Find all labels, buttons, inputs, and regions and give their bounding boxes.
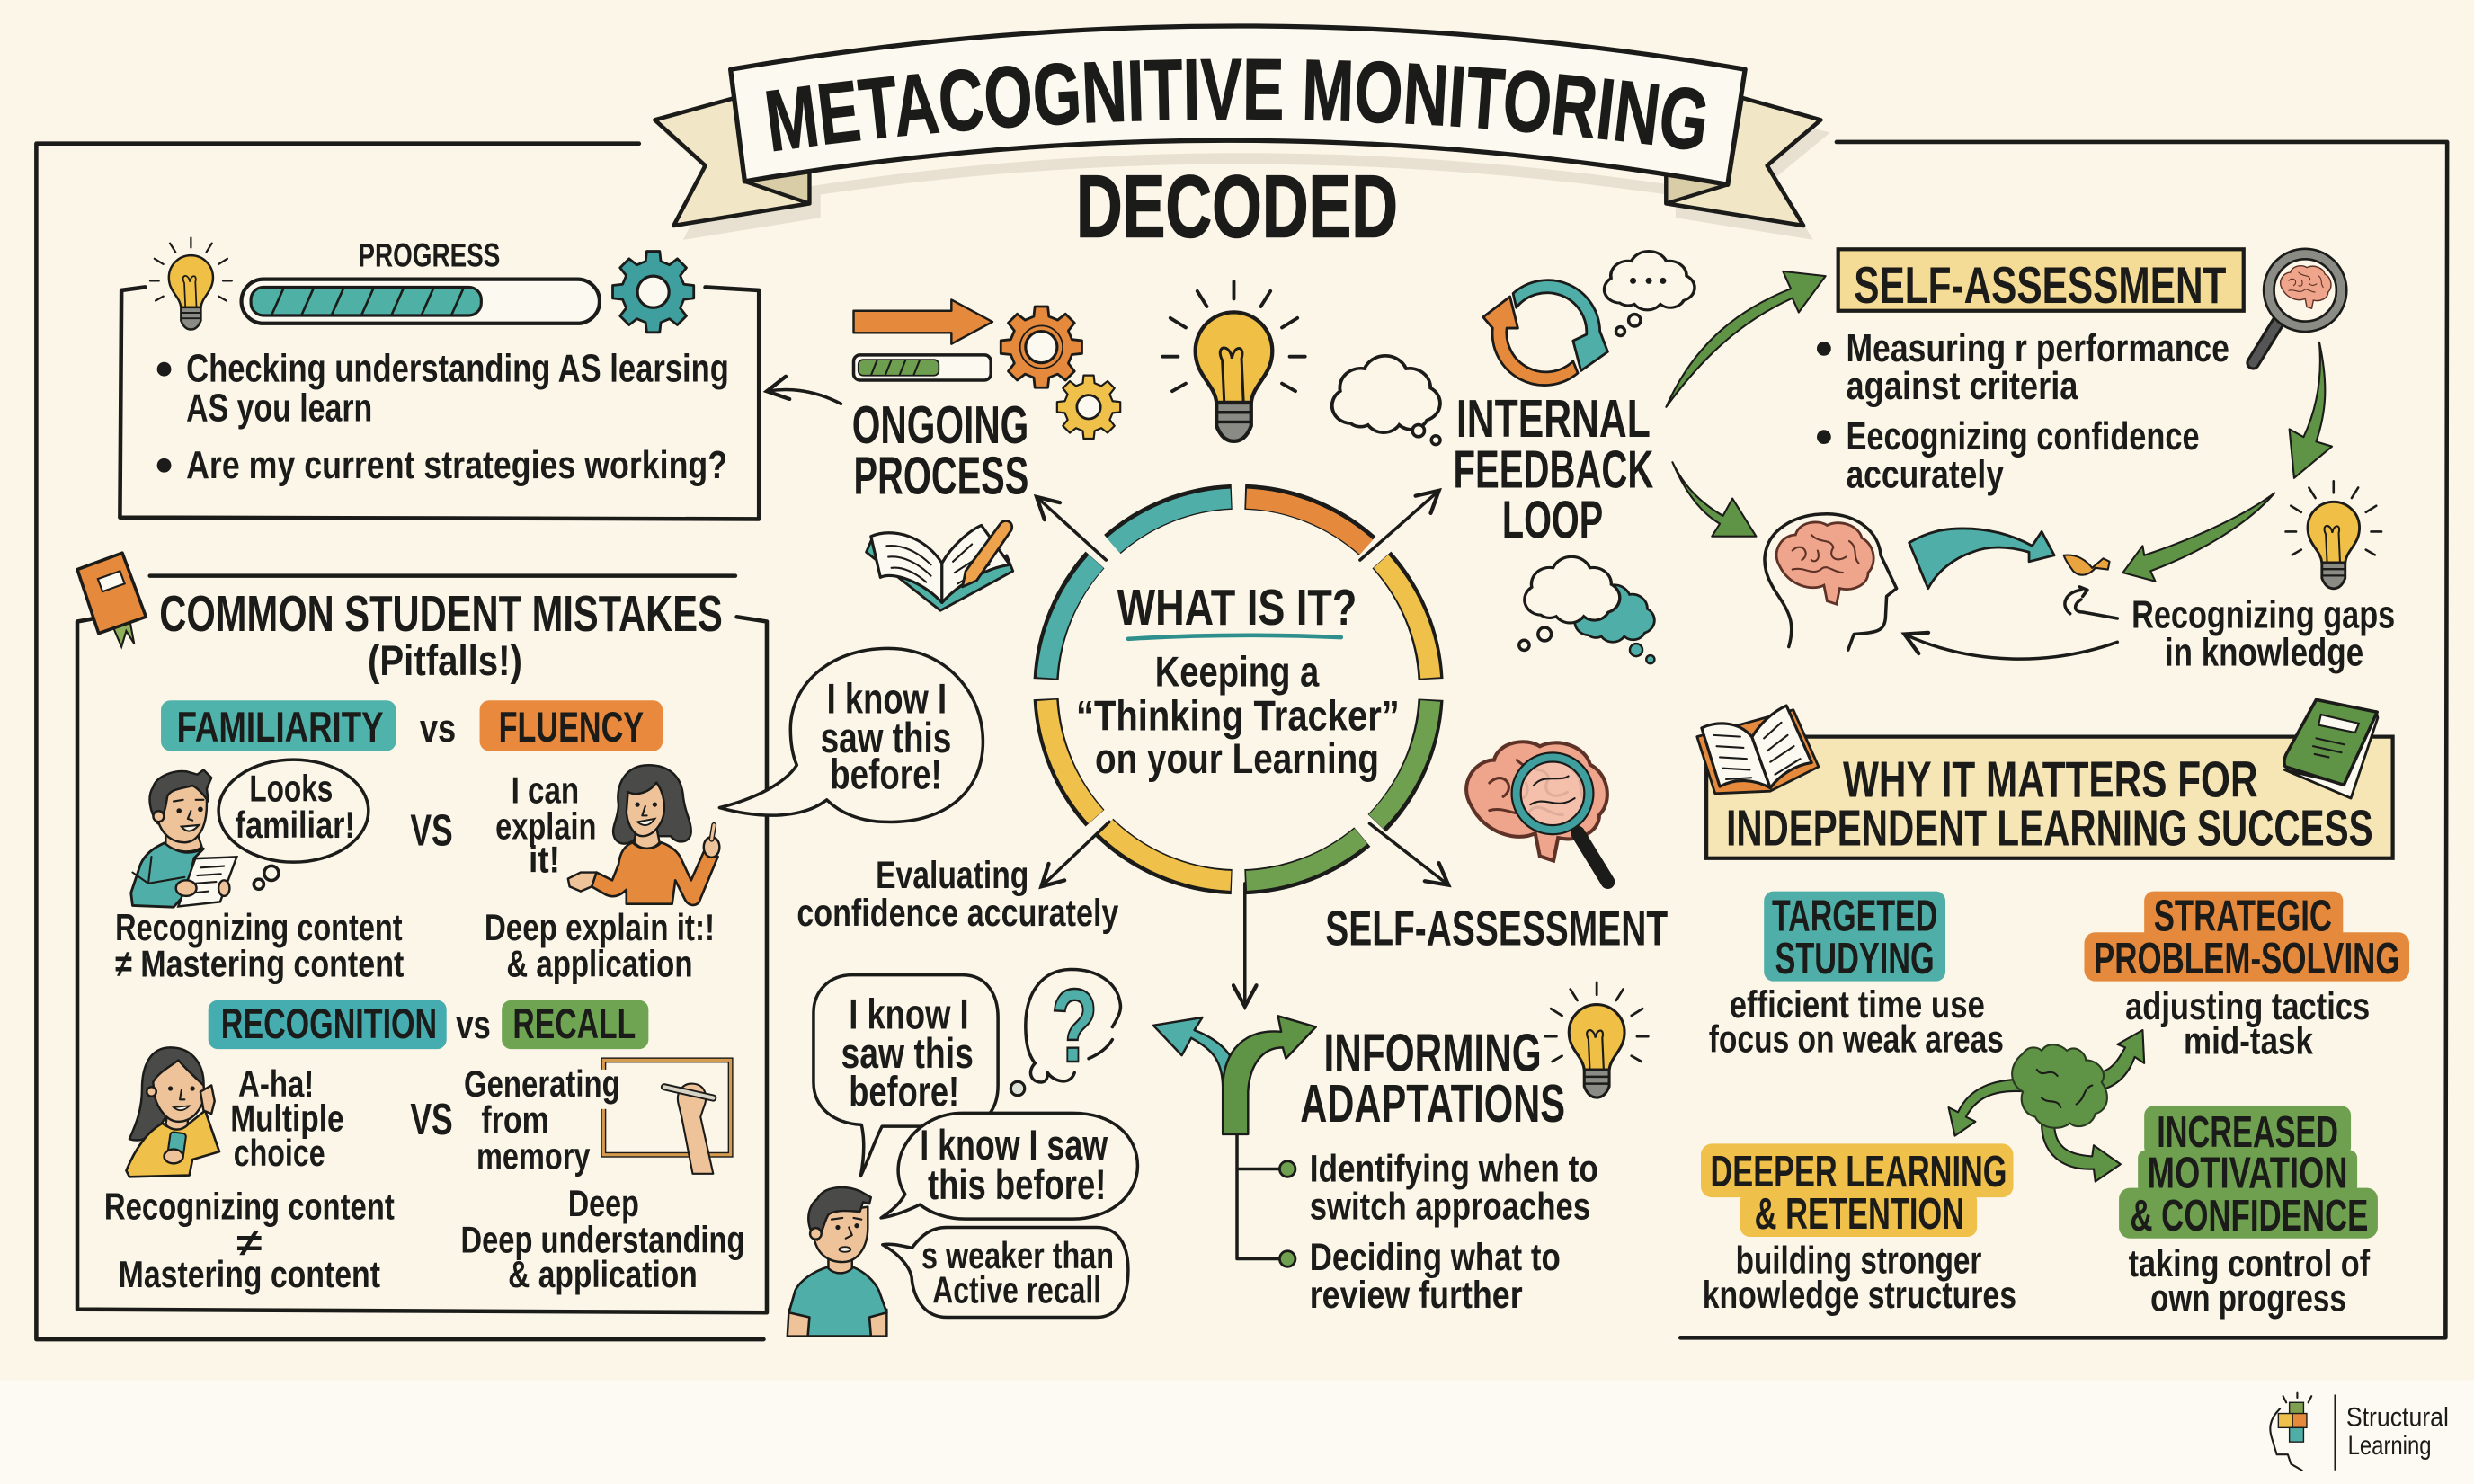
logo text: Structural <box>2346 1403 2449 1433</box>
speech bubble: i know i saw: I know I saw <box>920 1122 1108 1169</box>
speech bubble: i know i saw this before: before! <box>830 751 942 799</box>
speech bubble: i know i saw this before: saw this <box>821 715 951 762</box>
speech bubble: i know i saw this before bottom: I know I <box>849 991 969 1038</box>
icon: orange arrow <box>854 299 992 344</box>
logo: structural learning <box>2270 1393 2449 1471</box>
block: increased motivation: & CONFIDENCE <box>2130 1192 2368 1240</box>
vs label: VS <box>410 807 453 856</box>
text: a-ha multiple choice <box>230 1062 344 1174</box>
arrow: circle to informing adaptations <box>1244 884 1246 1007</box>
speech bubble: i know i saw: this before! <box>928 1161 1106 1209</box>
icon: teal and white clouds <box>1519 556 1654 663</box>
ribbon left tail <box>654 98 809 226</box>
block: strategic problem-solving: mid-task <box>2184 1019 2313 1062</box>
text: generating from memory: memory <box>476 1135 591 1177</box>
block: targeted studying: efficient time use <box>1730 983 1985 1026</box>
vs label: VS <box>410 1096 453 1144</box>
speech bubble: i know i saw this before: I know I <box>827 675 947 723</box>
caption: recognizing not mastering: ≠ <box>236 1222 262 1264</box>
icon: brain with magnifier <box>1466 742 1607 882</box>
underline <box>1128 635 1341 639</box>
icon: big lightbulb <box>1162 281 1305 441</box>
logo divider <box>2335 1394 2336 1471</box>
icon: cycle arrows <box>1483 280 1607 386</box>
bullet 1: AS you learn <box>186 387 372 431</box>
heading: self-assessment middle: SELF-ASSESSMENT <box>1325 901 1668 955</box>
heading: internal feedback loop <box>1453 388 1653 549</box>
text: generating from memory: Generating <box>464 1062 620 1105</box>
bubble: looks familiar: familiar! <box>236 804 355 846</box>
heading: informing adaptations <box>1300 1023 1565 1133</box>
bullet list: Measuring r performance <box>1846 326 2229 370</box>
label: evaluating confidence: confidence accurately <box>796 892 1118 935</box>
item: identifying: switch approaches <box>1310 1186 1590 1229</box>
block: increased motivation: taking control of <box>2129 1242 2371 1285</box>
icon: thought cloud left <box>1332 356 1440 445</box>
arrow: circle to evaluating <box>1041 822 1109 886</box>
logo text <box>2346 1403 2449 1461</box>
item: deciding: review further <box>1310 1274 1523 1317</box>
block: deeper learning: building stronger <box>1736 1239 1982 1282</box>
bullet 2: Are my current strategies working? <box>186 443 727 487</box>
bullet list <box>1817 326 2229 496</box>
vs label: vs <box>420 706 456 751</box>
heading box <box>1706 737 2393 858</box>
bullet list: accurately <box>1846 452 2004 496</box>
definition text <box>1076 648 1400 783</box>
title banner <box>653 23 1830 240</box>
logo text: Learning <box>2348 1431 2432 1461</box>
block: targeted studying: STUDYING <box>1775 935 1935 983</box>
caption: recognizing vs mastering <box>115 906 404 984</box>
ribbon main band <box>731 26 1745 184</box>
pill: familiarity: FAMILIARITY <box>177 704 384 751</box>
heading: internal feedback loop: INTERNAL <box>1456 388 1651 449</box>
icon: small lightbulb <box>2286 481 2381 589</box>
caption: deep explain <box>485 906 715 984</box>
icon: teal gear <box>613 252 694 333</box>
title line 2: DECODED <box>1076 156 1398 255</box>
icon: orange gear <box>1001 307 1081 387</box>
heading: internal feedback loop: FEEDBACK <box>1453 439 1653 499</box>
pill: recall: RECALL <box>512 1000 636 1048</box>
arrow: return to head <box>1904 635 2117 659</box>
arrow: magnifier to bulb <box>2290 342 2332 478</box>
heading: ongoing process: PROCESS <box>854 445 1028 505</box>
icon: orange book <box>77 553 146 647</box>
text: i can explain it: I can <box>512 769 579 811</box>
bullet 1 <box>157 347 729 431</box>
caption: deep explain: & application <box>506 942 692 984</box>
caption: recognizing not mastering: Mastering content <box>119 1253 380 1295</box>
icon: lightbulb <box>1545 982 1648 1097</box>
footer strip <box>0 1381 2474 1484</box>
bullet list: against criteria <box>1846 364 2078 408</box>
icon: forked arrow <box>1153 1016 1316 1134</box>
branch lines <box>1237 1134 1281 1259</box>
caption: recognizing vs mastering: ≠ Mastering content <box>115 942 404 984</box>
arrow: circle to ongoing process <box>1037 497 1106 560</box>
caption: recognizing vs mastering: Recognizing content <box>115 906 403 948</box>
arrow: feedback to head <box>1672 462 1756 537</box>
block: deeper learning: DEEPER LEARNING <box>1711 1148 2007 1196</box>
arrow: ongoing process to progress panel <box>767 390 841 404</box>
panel: why it matters <box>1697 699 2409 1320</box>
icon: open book <box>1697 706 1819 794</box>
ongoing process group <box>852 299 1120 505</box>
icon: green brain with arrows <box>1949 1030 2144 1182</box>
label: evaluating confidence: Evaluating <box>876 854 1028 897</box>
heading: COMMON STUDENT MISTAKES <box>159 585 723 642</box>
block: targeted studying: TARGETED <box>1772 892 1937 940</box>
title line 1: METACOGNITIVE MONITORING <box>766 59 1706 151</box>
bubble: looks familiar: Looks <box>249 768 333 810</box>
outer frame: right <box>1680 142 2447 1337</box>
block: increased motivation: INCREASED <box>2157 1108 2338 1157</box>
arrow: bulb to brain <box>2122 493 2274 582</box>
arrow: circle to self-assessment <box>1369 823 1448 885</box>
block: deeper learning: knowledge structures <box>1703 1274 2016 1317</box>
text: i can explain it: explain <box>495 805 596 848</box>
caption: deep understanding: Deep <box>568 1182 639 1224</box>
speech bubble: i know i saw this before <box>719 648 983 822</box>
definition text: “Thinking Tracker” <box>1076 693 1400 741</box>
ribbon right fold <box>1666 172 1728 203</box>
label box <box>1838 249 2244 311</box>
panel: self-assessment <box>1817 249 2342 496</box>
heading: informing adaptations: INFORMING <box>1324 1023 1542 1083</box>
label: evaluating confidence <box>796 854 1118 935</box>
bullet 1: Checking understanding AS learsing <box>186 347 729 391</box>
caption: recognizing not mastering <box>104 1186 395 1295</box>
outer frame: left <box>36 144 763 1339</box>
heading: ongoing process <box>852 395 1028 505</box>
block: deeper learning <box>1701 1143 2016 1317</box>
speech bubble: i know i saw <box>881 1113 1137 1219</box>
pill: recognition: RECOGNITION <box>221 1000 437 1048</box>
speech bubble: i know i saw this before bottom: saw this <box>841 1030 974 1078</box>
progress bar <box>242 280 600 324</box>
item: identifying: Identifying when to <box>1310 1148 1598 1191</box>
label: recognizing gaps: in knowledge <box>2165 631 2363 675</box>
text: generating from memory <box>464 1062 623 1177</box>
speech bubble: weaker than active recall: Active recall <box>932 1270 1101 1311</box>
progress label: PROGRESS <box>358 237 500 274</box>
diagram: what is it circle <box>1046 497 1431 882</box>
icon: magnifier with brain <box>2253 254 2342 363</box>
label: recognizing gaps <box>2131 593 2395 675</box>
internal feedback group <box>1332 252 1695 663</box>
icon: whiteboard with hand <box>603 1060 731 1174</box>
caption: deep understanding: Deep understanding <box>461 1219 744 1261</box>
block: increased motivation: own progress <box>2150 1276 2346 1320</box>
text: i can explain it: it! <box>529 839 560 881</box>
text: a-ha multiple choice: choice <box>234 1132 325 1174</box>
speech bubble: weaker than active recall: s weaker than <box>921 1235 1114 1276</box>
speech bubble: i know i saw this before bottom <box>814 975 998 1176</box>
block: targeted studying <box>1709 892 2004 1062</box>
icon: lightbulb <box>150 237 232 329</box>
block: deeper learning: & RETENTION <box>1755 1190 1964 1239</box>
block: increased motivation <box>2119 1106 2378 1320</box>
heading: informing adaptations: ADAPTATIONS <box>1300 1073 1565 1133</box>
thought bubble: question mark: ? <box>1051 967 1099 1084</box>
icon: yellow gear <box>1057 376 1120 439</box>
figure: woman with phone <box>126 1047 219 1177</box>
heading: SELF-ASSESSMENT <box>1854 257 2226 315</box>
heading: internal feedback loop: LOOP <box>1502 489 1603 549</box>
heading text <box>1726 751 2373 857</box>
caption: deep explain: Deep explain it:! <box>485 906 715 948</box>
label: recognizing gaps: Recognizing gaps <box>2131 593 2395 637</box>
icon: head with brain <box>1765 514 1897 650</box>
figure: boy reading <box>131 769 236 907</box>
definition text: on your Learning <box>1095 735 1379 783</box>
arrow: circle to internal feedback <box>1360 491 1439 560</box>
informing adaptations group <box>1153 982 1648 1317</box>
item: identifying <box>1279 1148 1598 1229</box>
block: strategic problem-solving: adjusting tactics <box>2125 985 2370 1028</box>
figure: boy thinking <box>788 1187 886 1337</box>
arrow: feedback to self-assessment <box>1666 271 1826 407</box>
ribbon left fold <box>744 172 809 203</box>
ribbon right tail <box>1666 98 1820 226</box>
block: strategic problem-solving: STRATEGIC <box>2154 892 2332 940</box>
text: a-ha multiple choice: A-ha! <box>238 1062 314 1105</box>
icon: thought cloud with dots <box>1605 252 1695 335</box>
caption: deep understanding: & application <box>508 1253 698 1295</box>
block: strategic problem-solving <box>2084 892 2409 1062</box>
text: generating from memory: from <box>481 1098 549 1141</box>
panel: progress <box>120 237 759 519</box>
speech bubble: i know i saw this before bottom: before! <box>849 1068 959 1115</box>
vs label: vs <box>456 1003 491 1047</box>
text: a-ha multiple choice: Multiple <box>230 1097 344 1139</box>
arrow: teal curved <box>1909 529 2054 589</box>
icon: small swirl <box>2065 587 2117 618</box>
definition text: Keeping a <box>1155 648 1320 696</box>
speech bubble: weaker than active recall <box>883 1227 1128 1317</box>
heading: ongoing process: ONGOING <box>852 395 1028 455</box>
ring segments <box>1046 497 1431 882</box>
text: i can explain it <box>495 769 596 881</box>
caption: recognizing not mastering: Recognizing content <box>104 1186 395 1228</box>
icon: open book with pencil <box>867 520 1013 610</box>
panel: common student mistakes <box>77 553 767 1312</box>
thought bubble: question mark <box>1010 967 1120 1096</box>
heading text: WHY IT MATTERS FOR <box>1843 751 2258 807</box>
item: deciding <box>1279 1236 1561 1317</box>
block: targeted studying: focus on weak areas <box>1709 1018 2004 1062</box>
heading: what is it: WHAT IS IT? <box>1117 579 1357 635</box>
bubble: looks familiar <box>218 760 369 889</box>
icon: small orange leaf <box>2064 555 2110 575</box>
subheading: (Pitfalls!) <box>368 637 522 685</box>
icon: head with cross <box>2270 1393 2311 1471</box>
bullet list: Eecognizing confidence <box>1846 414 2200 458</box>
icon: green book <box>2284 699 2378 798</box>
block: increased motivation: MOTIVATION <box>2148 1150 2348 1198</box>
icon: small progress bar <box>854 355 991 380</box>
pill: fluency: FLUENCY <box>499 704 644 751</box>
item: deciding: Deciding what to <box>1310 1236 1561 1279</box>
figure: woman explaining <box>568 765 719 905</box>
caption: deep understanding <box>461 1182 744 1295</box>
